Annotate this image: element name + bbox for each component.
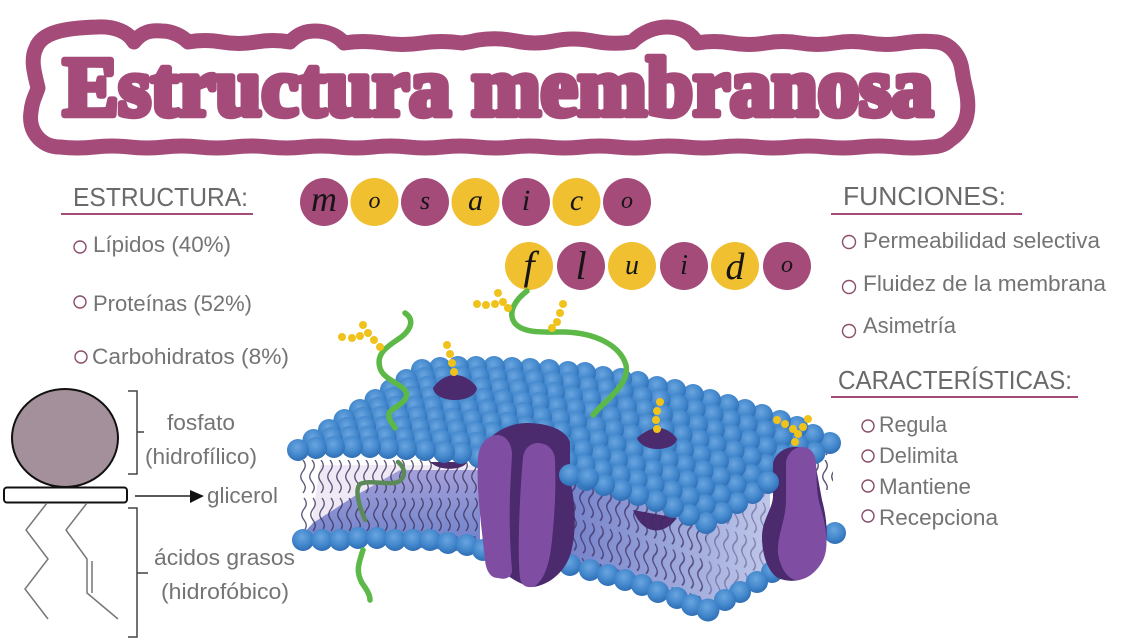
bullet: recepciona: [862, 510, 874, 522]
lower phospholipid heads: [292, 522, 846, 622]
word: mosaico: [300, 178, 651, 226]
word: fluido: d: [726, 246, 746, 288]
word: fluido: i: [680, 250, 688, 281]
phosphate head: [12, 389, 118, 487]
arrow to glicerol: [135, 490, 204, 503]
lipid tails: [300, 452, 833, 606]
text: regula: Regula: [879, 412, 948, 437]
word: fluido: o: [781, 252, 793, 278]
word: fluido: [505, 242, 811, 290]
label: ácidos grasos: ácidos grasos: [154, 545, 295, 570]
text: recepciona: Recepciona: [879, 505, 999, 530]
heading: estructura: ESTRUCTURA:: [73, 182, 248, 212]
lower green protein tail: [358, 550, 370, 600]
surface protein caps: [433, 375, 677, 449]
inner green protein: [357, 462, 404, 520]
bullet: mantiene: [862, 480, 874, 492]
title banner: [31, 27, 968, 148]
bullet: fluidez: [842, 280, 856, 294]
panel: características: [831, 365, 1078, 530]
label: hidrofóbico: (hidrofóbico): [161, 579, 289, 604]
heading: funciones: FUNCIONES:: [843, 181, 1006, 211]
word: mosaico: o: [621, 188, 633, 214]
text: lípidos: Lípidos (40%): [93, 232, 231, 257]
title: Estructura membranosa: [63, 41, 933, 134]
panel: phospholipid diagram: [4, 389, 295, 637]
panel: estructura: [61, 182, 289, 369]
chart: fluid mosaic membrane illustration: [287, 289, 846, 622]
word: fluido: u: [625, 250, 639, 281]
word: mosaico: s: [420, 186, 430, 215]
banner outline: [31, 27, 968, 148]
bullet: regula: [862, 420, 874, 432]
heading: características: CARACTERÍSTICAS:: [838, 365, 1072, 395]
label: fosfato: fosfato: [167, 410, 235, 435]
bullet: asimetría: [842, 324, 856, 338]
word: fluido: l: [575, 243, 587, 288]
carbohydrate chains: [338, 289, 812, 446]
word: mosaico: a: [468, 184, 483, 217]
bullet: permeabilidad: [842, 236, 856, 248]
bullet: proteínas: [74, 296, 86, 308]
fatty acid tails: [25, 503, 118, 619]
text: asimetría: Asimetría: [863, 313, 957, 338]
text: delimita: Delimita: [879, 443, 959, 468]
text: proteínas: Proteínas (52%): [93, 291, 252, 316]
lower hidden protein humps: [430, 462, 677, 530]
label: hidrofílico: (hidrofílico): [145, 444, 257, 469]
bullet: lípidos: [74, 241, 86, 253]
word: mosaico: m: [311, 179, 337, 219]
word: fluido: f: [523, 243, 539, 288]
panel: funciones: [831, 181, 1107, 338]
word: mosaico: i: [522, 184, 530, 217]
text: carbohidratos: Carbohidratos (8%): [92, 344, 289, 369]
green protein left: [379, 313, 411, 428]
inner membrane fill: [300, 465, 770, 610]
brace: fosfato: [128, 391, 144, 474]
glycerol bar: [4, 488, 127, 502]
word: mosaico: o: [368, 188, 380, 214]
brace: ácidos grasos: [128, 508, 148, 637]
label: glicerol: glicerol: [207, 483, 278, 508]
upper phospholipid sheet: [287, 356, 841, 534]
text: permeabilidad: Permeabilidad selectiva: [863, 228, 1101, 253]
text: mantiene: Mantiene: [879, 474, 971, 499]
bullet: delimita: [862, 450, 874, 462]
right transmembrane protein: [762, 447, 827, 581]
bullet: carbohidratos: [75, 351, 87, 363]
word: mosaico: c: [570, 184, 583, 217]
spheres in front of proteins: [559, 464, 779, 493]
large channel protein: [478, 423, 575, 587]
text: fluidez: Fluidez de la membrana: [863, 271, 1107, 296]
green protein right: [512, 291, 626, 415]
